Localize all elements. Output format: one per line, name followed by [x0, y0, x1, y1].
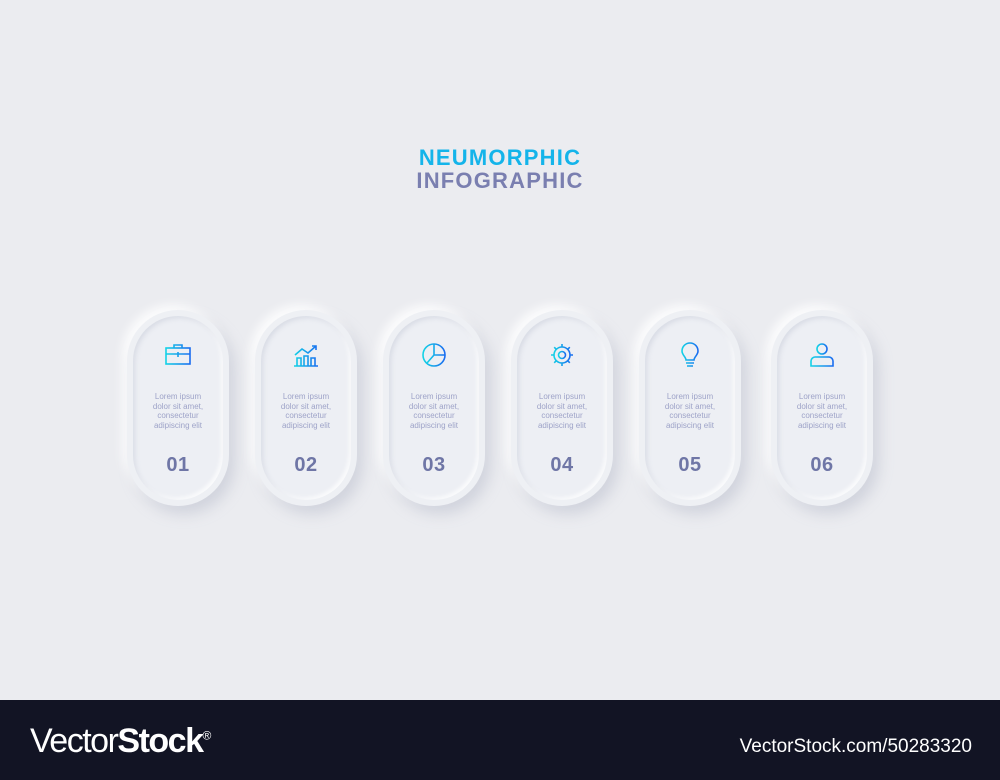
number 06: 06	[810, 454, 834, 476]
number 03: 03	[422, 454, 446, 476]
number 04: 04	[550, 454, 574, 476]
card 05	[639, 310, 741, 506]
text 01: Lorem ipsum	[155, 392, 201, 401]
card 01	[127, 310, 229, 506]
footer url: VectorStock.com/50283320	[740, 736, 972, 757]
icon: pie chart	[422, 343, 446, 367]
text 04: consectetur	[541, 411, 583, 420]
text 04	[537, 392, 587, 430]
text 04: Lorem ipsum	[539, 392, 585, 401]
text 03: Lorem ipsum	[411, 392, 457, 401]
number 05: 05	[678, 454, 702, 476]
text 04: adipiscing elit	[538, 420, 586, 430]
text 02	[281, 392, 331, 430]
text 02: consectetur	[285, 411, 327, 420]
text 06	[797, 392, 847, 430]
text 06: dolor sit amet,	[797, 402, 847, 410]
text 06: Lorem ipsum	[799, 392, 845, 401]
text 01: dolor sit amet,	[153, 402, 203, 410]
text 05: Lorem ipsum	[667, 392, 713, 401]
text 02: dolor sit amet,	[281, 402, 331, 410]
text 05: dolor sit amet,	[665, 402, 715, 410]
text 03: consectetur	[413, 411, 455, 420]
text 03: dolor sit amet,	[409, 402, 459, 410]
card 02	[255, 310, 357, 506]
text 06: consectetur	[801, 411, 843, 420]
number 01: 01	[166, 454, 190, 476]
icon: user	[810, 343, 834, 367]
text 03: adipiscing elit	[410, 420, 458, 430]
title: INFOGRAPHIC	[416, 168, 584, 193]
text 04: dolor sit amet,	[537, 402, 587, 410]
text 05: consectetur	[669, 411, 711, 420]
text 01	[153, 392, 203, 430]
text 02: Lorem ipsum	[283, 392, 329, 401]
card 03	[383, 310, 485, 506]
icon: gear	[551, 344, 573, 366]
card 04	[511, 310, 613, 506]
footer	[0, 700, 1000, 780]
title	[416, 145, 584, 193]
text 02: adipiscing elit	[282, 420, 330, 430]
icon: chart	[294, 345, 318, 367]
text 01: consectetur	[157, 411, 199, 420]
text 01: adipiscing elit	[154, 420, 202, 430]
icon: briefcase	[165, 344, 191, 365]
text 05	[665, 392, 715, 430]
text 06: adipiscing elit	[798, 420, 846, 430]
footer logo: VectorStock®	[30, 722, 210, 760]
text 03	[409, 392, 459, 430]
title: NEUMORPHIC	[419, 145, 581, 170]
card 06	[771, 310, 873, 506]
icon: lightbulb	[681, 342, 699, 367]
text 05: adipiscing elit	[666, 420, 714, 430]
number 02: 02	[294, 454, 318, 476]
